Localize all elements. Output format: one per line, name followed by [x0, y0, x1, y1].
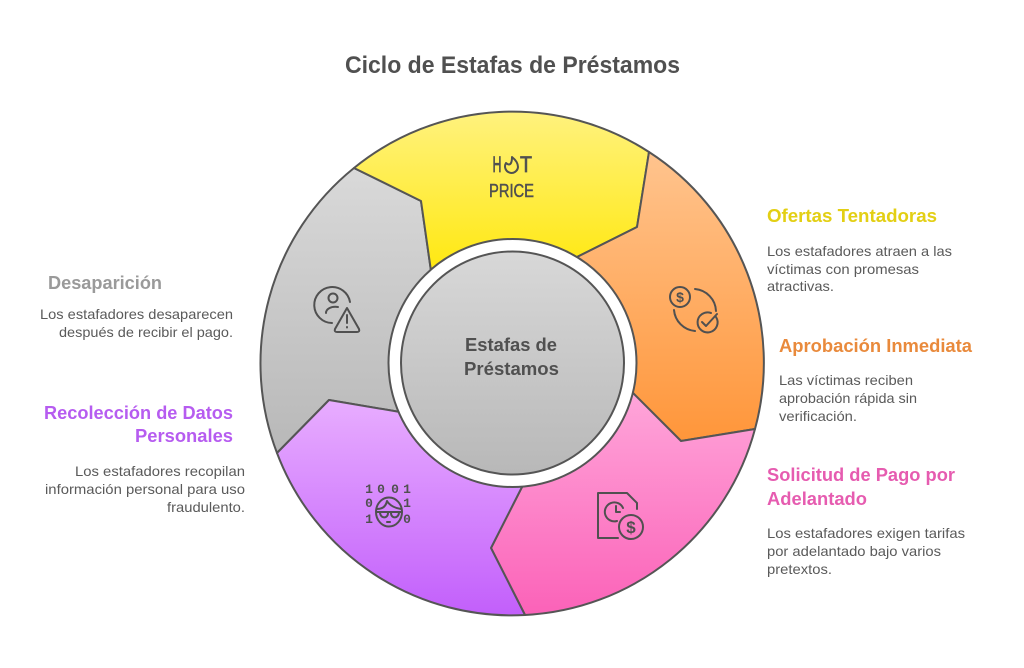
segment: orange — [575, 152, 764, 441]
icon: hacker with binary digits: 1 — [403, 482, 411, 497]
label: Solicitud de Pago por Adelantado: Adelantado — [767, 489, 867, 509]
label: Solicitud de Pago por Adelantado: Los estafadores exigen tarifas — [767, 525, 965, 541]
label: Solicitud de Pago por Adelantado: por adelantado bajo varios — [767, 543, 941, 559]
icon: document with clock and dollar — [598, 493, 643, 539]
icon: hacker with binary digits: 0 — [391, 482, 399, 497]
icon: hot price — [489, 152, 534, 201]
label: Recolección de Datos Personales: Los estafadores recopilan — [75, 463, 245, 479]
label: Ofertas Tentadoras: víctimas con promesas — [767, 261, 919, 277]
icon: hacker with binary digits: 1 — [365, 482, 373, 497]
center label: Estafas de — [465, 335, 557, 355]
center ring — [388, 239, 636, 487]
label: Aprobación Inmediata: Las víctimas reciben — [779, 372, 913, 388]
label: Recolección de Datos Personales: fraudulento. — [167, 499, 245, 515]
label: Ofertas Tentadoras: atractivas. — [767, 278, 834, 294]
cycle diagram — [260, 112, 764, 615]
label: Aprobación Inmediata: aprobación rápida sin — [779, 390, 917, 406]
center circle — [401, 252, 624, 474]
label: Recolección de Datos Personales: Recolección de Datos — [44, 403, 233, 423]
icon: hacker with binary digits: 1 — [403, 496, 411, 511]
segment: pink — [491, 392, 755, 615]
segment: purple — [277, 400, 525, 615]
label: Solicitud de Pago por Adelantado: pretextos. — [767, 561, 832, 577]
label: Recolección de Datos Personales: información personal para uso — [45, 481, 245, 497]
label: Desaparición: Desaparición — [48, 273, 162, 293]
segment: gray — [260, 168, 431, 453]
icon: money and check cycle — [670, 287, 718, 332]
icon: hacker with binary digits — [365, 482, 411, 527]
label: Aprobación Inmediata — [779, 336, 973, 424]
label: Solicitud de Pago por Adelantado — [767, 465, 965, 577]
icon: hacker with binary digits: 0 — [403, 512, 411, 527]
label: Solicitud de Pago por Adelantado: Solicitud de Pago por — [767, 465, 955, 485]
icon: hacker with binary digits: 0 — [365, 496, 373, 511]
label: Recolección de Datos Personales: Personales — [135, 426, 233, 446]
label: Aprobación Inmediata: verificación. — [779, 408, 857, 424]
label: Ofertas Tentadoras: Los estafadores atraen a las — [767, 243, 952, 259]
center label — [464, 335, 559, 379]
segment: yellow — [354, 112, 649, 271]
icon: document with clock and dollar: $ — [626, 518, 636, 537]
label: Ofertas Tentadoras — [767, 206, 952, 294]
icon: hacker with binary digits: 1 — [365, 512, 373, 527]
label: Desaparición: Los estafadores desaparecen — [40, 306, 233, 322]
icon: hot price: H — [492, 152, 502, 177]
icon: person with warning — [314, 287, 359, 332]
label: Recolección de Datos Personales — [44, 403, 245, 515]
center label: Préstamos — [464, 359, 559, 379]
title: Ciclo de Estafas de Préstamos — [345, 52, 680, 79]
label: Aprobación Inmediata: Aprobación Inmediata — [779, 336, 973, 356]
label: Desaparición: después de recibir el pago. — [59, 324, 233, 340]
icon: hot price: PRICE — [489, 181, 534, 201]
icon: hot price: T — [520, 152, 532, 177]
icon: money and check cycle: $ — [676, 289, 684, 305]
label: Ofertas Tentadoras: Ofertas Tentadoras — [767, 206, 937, 226]
icon: hacker with binary digits: 0 — [377, 482, 385, 497]
label: Desaparición — [40, 273, 233, 340]
